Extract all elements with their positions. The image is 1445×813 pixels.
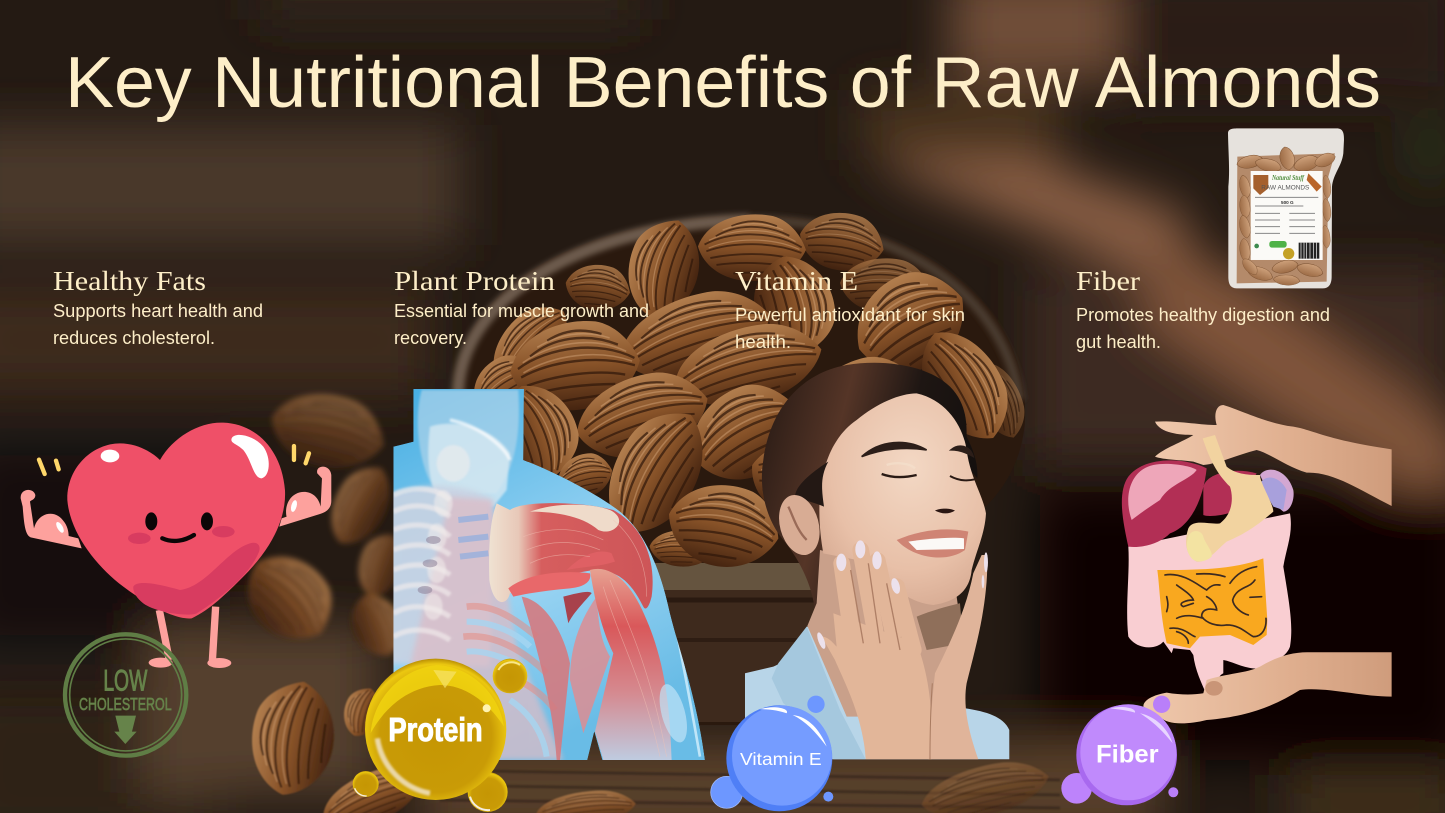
product photo: raw almonds bag xyxy=(1228,128,1344,288)
body text: healthy fats: reduces cholesterol. xyxy=(53,328,215,348)
badge: low cholesterol stamp: LOW xyxy=(103,665,148,698)
badge: fiber bubble xyxy=(1061,696,1178,805)
panel: plant protein xyxy=(353,266,705,812)
illustration: shoulder muscle anatomy xyxy=(383,389,705,760)
badge: fiber bubble: Fiber xyxy=(1096,741,1159,769)
product photo: raw almonds bag: RAW ALMONDS xyxy=(1261,185,1309,191)
blurred almonds left xyxy=(230,380,412,664)
muscles xyxy=(489,503,672,760)
body text: vitamin e xyxy=(735,305,965,352)
heading: fiber: Fiber xyxy=(1076,266,1140,296)
product photo: raw almonds bag: Natural Stuff xyxy=(1271,173,1305,182)
body text: plant protein: Essential for muscle growth and xyxy=(394,301,649,321)
product photo: raw almonds bag: 500 G xyxy=(1281,200,1294,205)
body text: fiber: Promotes healthy digestion and xyxy=(1076,305,1330,325)
icon: flexing heart mascot xyxy=(21,423,331,668)
body text: fiber: gut health. xyxy=(1076,332,1161,352)
badge: protein bubble xyxy=(353,659,527,812)
heading: healthy fats: Healthy Fats xyxy=(53,266,206,296)
title: Key Nutritional Benefits of Raw Almonds xyxy=(65,43,1381,123)
translucent head and neck xyxy=(418,390,519,507)
bowl xyxy=(455,215,1025,725)
translucent ribs and spine xyxy=(383,445,563,760)
badge: low cholesterol stamp xyxy=(65,634,186,756)
foreground almonds xyxy=(241,673,1054,813)
photo: smiling woman touching face xyxy=(745,363,1009,759)
body text: vitamin e: Powerful antioxidant for skin xyxy=(735,305,965,325)
heading: vitamin e: Vitamin E xyxy=(735,266,858,296)
body text: healthy fats xyxy=(53,301,263,348)
body text: healthy fats: Supports heart health and xyxy=(53,301,263,321)
almonds in bowl xyxy=(461,204,1033,579)
badge: low cholesterol stamp: CHOLESTEROL xyxy=(79,694,172,714)
heading: plant protein: Plant Protein xyxy=(394,266,556,296)
badge: vitamin e bubble: Vitamin E xyxy=(740,749,822,769)
panel: vitamin e xyxy=(711,266,1009,811)
body text: vitamin e: health. xyxy=(735,332,791,352)
body text: plant protein xyxy=(394,301,649,348)
hands xyxy=(816,540,988,759)
panel: healthy fats xyxy=(21,266,331,756)
body text: plant protein: recovery. xyxy=(394,328,467,348)
badge: vitamin e bubble xyxy=(711,696,833,811)
wood grain xyxy=(420,770,1060,808)
photo: hands holding paper digestive system xyxy=(1122,405,1392,723)
badge: protein bubble: Protein xyxy=(388,712,483,749)
panel: fiber xyxy=(1061,266,1392,805)
body text: fiber xyxy=(1076,305,1330,352)
